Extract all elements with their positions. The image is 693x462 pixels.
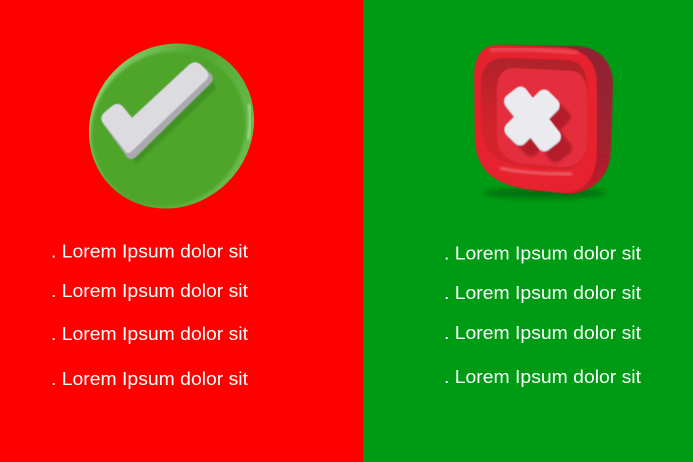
text block: left list: . Lorem Ipsum dolor sit [51, 324, 248, 344]
text block: left list: . Lorem Ipsum dolor sit [51, 242, 248, 262]
text block: right list [444, 244, 641, 387]
text block: left list [51, 242, 248, 389]
text block: left list: . Lorem Ipsum dolor sit [51, 281, 248, 301]
text block: left list: . Lorem Ipsum dolor sit [51, 369, 248, 389]
panel: right green background [363, 0, 693, 462]
icon: red cross button [474, 45, 613, 198]
icon: green check badge [55, 9, 288, 243]
panel: left red background [0, 0, 363, 462]
text block: right list: . Lorem Ipsum dolor sit [444, 283, 641, 303]
text block: right list: . Lorem Ipsum dolor sit [444, 323, 641, 343]
text block: right list: . Lorem Ipsum dolor sit [444, 244, 641, 264]
text block: right list: . Lorem Ipsum dolor sit [444, 367, 641, 387]
